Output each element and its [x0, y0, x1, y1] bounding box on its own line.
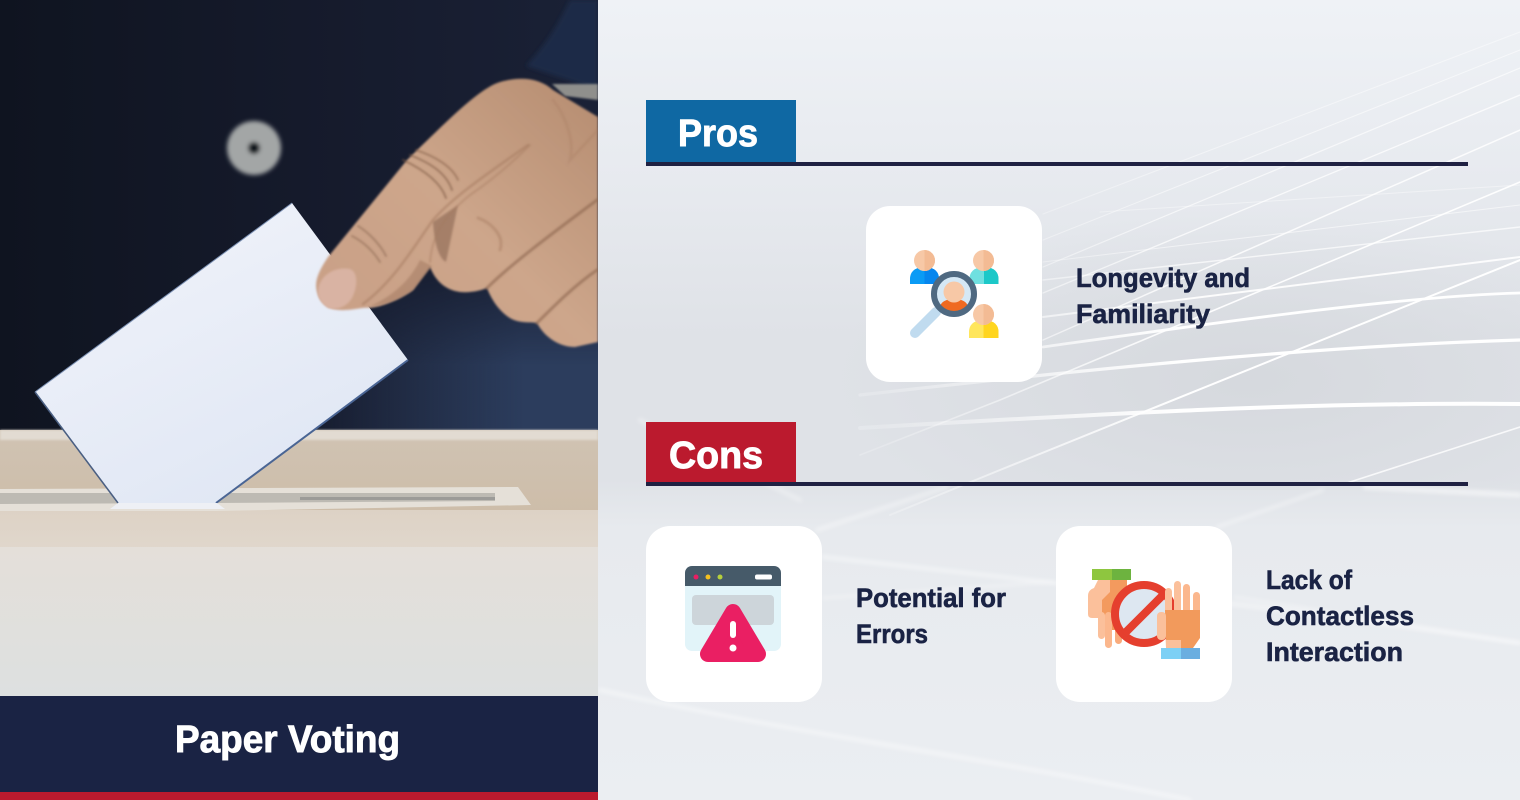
icon: hands with prohibition sign: [1088, 569, 1200, 659]
photo: hand dropping ballot into box: [0, 0, 598, 696]
card: Longevity and Familiarity: [866, 206, 1250, 382]
hand: [316, 79, 598, 347]
card: Longevity and Familiarity: Familiarity: [1076, 299, 1210, 329]
thumb nail: [318, 269, 356, 309]
section header: Pros: Pros: [678, 113, 758, 155]
background: light grey wire mesh: [598, 0, 1520, 800]
ballot slot: [0, 487, 531, 511]
card: Potential for Errors: [646, 526, 1006, 702]
label: Lack of: [1266, 565, 1353, 595]
ballot paper: [35, 203, 408, 503]
section header: Cons: Cons: [669, 435, 763, 477]
section header: Pros: [646, 100, 1468, 166]
title bar: [0, 696, 598, 800]
card: Lack of Contactless Interaction: [1056, 526, 1414, 702]
card: Potential for Errors: Errors: [856, 619, 928, 649]
box: [0, 430, 598, 512]
card: Lack of Contactless Interaction: Interaction: [1266, 637, 1403, 667]
label: Potential for: [856, 583, 1006, 613]
icon: people with magnifier: [910, 250, 998, 338]
title: Paper Voting: [175, 719, 400, 761]
icon: browser warning: [685, 566, 781, 654]
card: Lack of Contactless Interaction: Contactless: [1266, 601, 1414, 631]
jacket button: [227, 121, 281, 175]
section header: Cons: [646, 422, 1468, 486]
label: Longevity and: [1076, 263, 1250, 293]
